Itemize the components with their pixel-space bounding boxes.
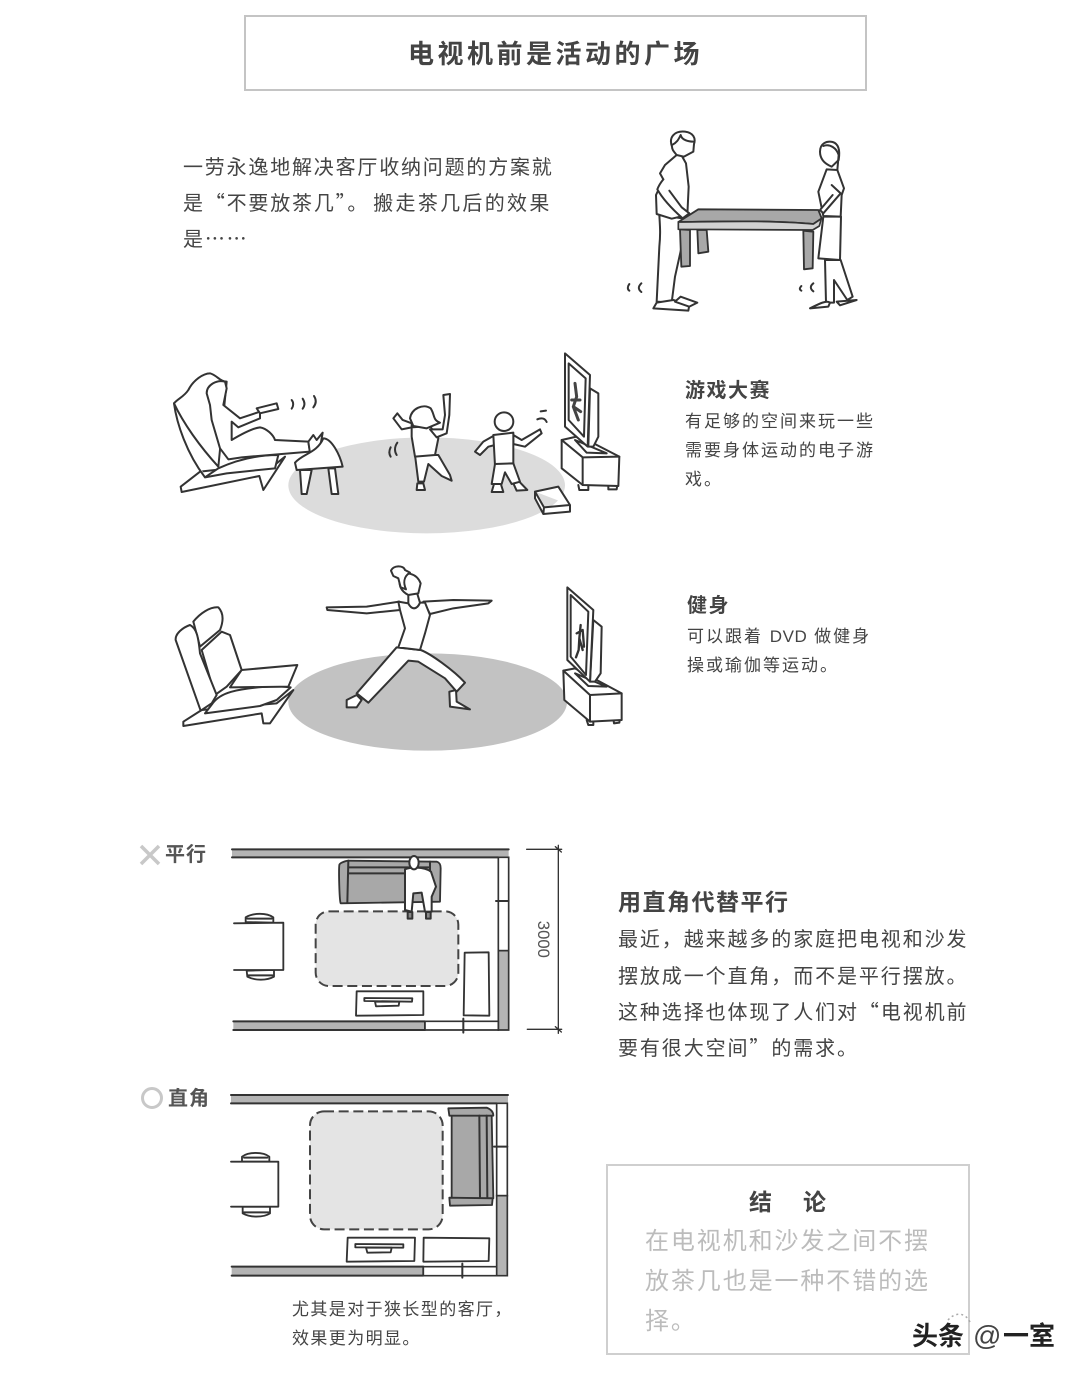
dining table and chairs: [231, 1153, 278, 1217]
dimension line 3000: [527, 845, 562, 1033]
conclusion box: 结: [749, 1189, 772, 1215]
conclusion box: [607, 1165, 969, 1354]
text block: game competition: 戏。: [685, 470, 723, 489]
activity rug: [310, 1111, 443, 1229]
sound waves: [292, 396, 316, 409]
sofa: [448, 1108, 493, 1206]
folding floor chair: [176, 607, 297, 726]
text block: fitness: 可以跟着 DVD 做健身: [687, 627, 871, 646]
title box: 电视机前是活动的广场: [408, 39, 703, 69]
text block: use right angle instead of parallel: 要有很大空间”的需求。: [618, 1032, 859, 1061]
girl with controller: [389, 394, 452, 490]
side cabinet: [423, 1238, 489, 1262]
floor plan: right angle layout: [231, 1095, 508, 1278]
tv cabinet: [347, 1238, 415, 1262]
dimension line 3000: 3000: [534, 921, 553, 958]
woman in warrior pose: [327, 566, 492, 709]
text block: fitness: 操或瑜伽等运动。: [687, 656, 839, 675]
text block: fitness: [687, 594, 871, 675]
text block: game competition: 有足够的空间来玩一些: [685, 412, 875, 431]
conclusion box: 论: [803, 1189, 826, 1215]
watermark: [912, 1314, 1055, 1351]
ottoman stool: [295, 438, 343, 494]
watermark: @: [973, 1320, 1001, 1351]
intro text: 一劳永逸地解决客厅收纳问题的方案就: [183, 156, 554, 179]
floor plan: parallel layout: [232, 845, 562, 1033]
dining table and chairs: [234, 914, 283, 980]
sofa: [339, 861, 441, 903]
watermark: 头条: [912, 1321, 964, 1351]
text block: use right angle instead of parallel: 摆放成一个直角，而不是平行摆放。: [618, 965, 968, 988]
boy with controller: [475, 411, 547, 492]
text block: game competition: [685, 378, 875, 489]
caption: 尤其是对于狭长型的客厅，: [292, 1300, 513, 1319]
text block: game competition: 需要身体运动的电子游: [685, 441, 875, 460]
conclusion box: 在电视机和沙发之间不摆: [645, 1228, 930, 1255]
television on stand: [563, 587, 622, 725]
television on stand: [562, 353, 619, 490]
tv cabinet: [356, 991, 423, 1016]
game console box: [535, 487, 570, 514]
caption: 效果更为明显。: [292, 1329, 421, 1348]
intro text: [183, 156, 554, 252]
walls: [231, 1095, 508, 1278]
reclining chair with woman: [174, 373, 323, 492]
seated person: [405, 856, 436, 919]
activity rug: [316, 911, 458, 986]
title box: [245, 16, 866, 90]
side cabinet: [464, 952, 489, 1016]
intro text: 是“不要放茶几”。搬走茶几后的效果: [183, 187, 552, 216]
conclusion box: 放茶几也是一种不错的选: [645, 1268, 930, 1295]
label: parallel with cross mark: [141, 843, 207, 866]
illustration: fitness yoga scene: [176, 566, 622, 751]
label: right angle with circle mark: [142, 1086, 210, 1110]
caption: [292, 1300, 513, 1348]
conclusion box: 择。: [645, 1308, 697, 1335]
text block: use right angle instead of parallel: 最近，越来越多的家庭把电视和沙发: [618, 928, 968, 951]
intro text: 是……: [183, 223, 248, 252]
illustration: two people moving the table: [628, 132, 857, 311]
text block: use right angle instead of parallel: [618, 889, 968, 1061]
watermark: 一室: [1003, 1321, 1055, 1351]
illustration: game competition scene: [174, 353, 619, 533]
text block: use right angle instead of parallel: 这种选择也体现了人们对“电视机前: [618, 996, 968, 1025]
text block: use right angle instead of parallel: 用直角代替平行: [618, 889, 790, 915]
text block: fitness: 健身: [687, 594, 730, 617]
text block: game competition: 游戏大赛: [685, 378, 771, 402]
label: right angle with circle mark: 直角: [168, 1086, 210, 1110]
label: parallel with cross mark: 平行: [165, 843, 207, 866]
walls: [232, 849, 509, 1033]
